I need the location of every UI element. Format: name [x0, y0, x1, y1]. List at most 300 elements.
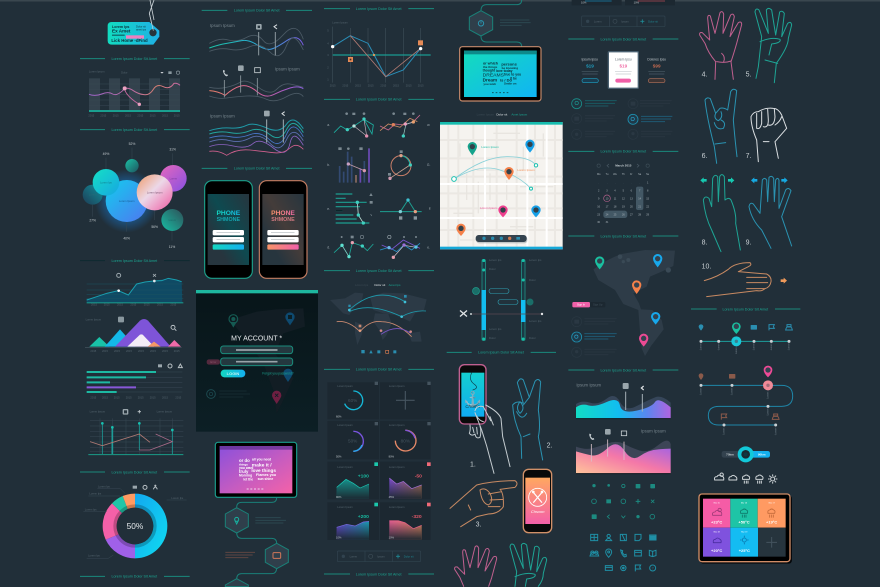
tile: purple weather: Mar 18	[714, 531, 721, 534]
panel: add new: Lorem Ipsum	[389, 384, 405, 388]
panel: stat -320: Lorem Ipsum	[389, 505, 405, 509]
heading: section 1	[80, 57, 190, 61]
heading: calendar: Lorem Ipsum Dolor Sit Amet	[600, 150, 646, 154]
chart: range sliders: Lorem Ips	[529, 258, 542, 262]
calendar: March 2015: 11	[614, 197, 617, 200]
chart: wave chart 2	[209, 65, 303, 101]
chart: bar and line chart	[88, 70, 180, 117]
icons: teal icon grid	[592, 484, 655, 519]
chart: bubble chart: 11%	[169, 245, 175, 249]
chart: mini ring d: G.	[427, 163, 430, 167]
tabs: dolor sit: Amet Ipsum	[511, 113, 528, 117]
buttons: sign in toggle: Sign Up	[593, 303, 603, 307]
timeline: winding: Lorem	[723, 428, 726, 435]
panel: gauge 50%: 50%	[348, 439, 357, 444]
chart: horizontal bars	[87, 364, 182, 400]
chart: multi line chart: Lorem Ipsum	[332, 21, 349, 25]
pin: blue top	[653, 254, 662, 267]
chart: mini triangle f	[380, 198, 431, 220]
pin: teal dim	[229, 315, 238, 328]
tablet: teal word cloud: is / Do	[500, 77, 513, 82]
tablet: pink word cloud: truly	[239, 469, 249, 474]
chart: wave chart 1: Ipsum Ipsum	[210, 23, 235, 28]
phone: teal login screen: PHONE	[216, 210, 241, 217]
panel: stat -50: 45%	[389, 495, 395, 499]
panels: cropped top cards: 10%	[634, 1, 640, 5]
pin: orange map pin	[504, 167, 514, 180]
tile: pink weather	[703, 499, 730, 528]
tablet: pink word cloud: Morning	[239, 474, 252, 478]
tile: blue weather	[730, 528, 758, 557]
chart: multi line chart: 3	[327, 53, 329, 57]
chart: horizontal bars: 2015	[90, 396, 97, 400]
chart: multi line chart: 2015	[406, 84, 412, 88]
chart: multi line chart: 2015	[368, 84, 374, 88]
chart: bubble chart	[83, 142, 187, 249]
tablet: teal word cloud: persons	[501, 61, 518, 66]
phone: anchor screen held in hand: ⚓	[464, 390, 482, 408]
tile: blue weather: Mar 19	[741, 531, 748, 534]
field: username	[221, 346, 293, 354]
panel: stat +100: +100	[358, 474, 369, 480]
button: login: LOGIN	[227, 371, 239, 376]
heading: section 1: Lorem Ipsum Dolor Sit Amet	[111, 57, 157, 61]
chart: bar and line chart: 2015	[113, 113, 119, 117]
timeline: winding: Lorem	[731, 388, 734, 395]
timeline: winding: Lorem	[767, 409, 770, 415]
phone: orange login screen: SHMONE	[271, 217, 295, 223]
pricing: featured card	[608, 52, 638, 88]
tablet: teal word cloud: true to you	[504, 73, 521, 77]
tile: purple weather: +20°C	[711, 548, 722, 553]
heading: area charts: Lorem Ipsum Dolor Sit Amet	[600, 368, 646, 372]
chart: bubble chart: 31%	[169, 148, 176, 152]
chart: bar and line chart: 2015	[137, 113, 144, 117]
hand 1: holding phone	[469, 405, 510, 473]
chart: mini horizontal bars e: e.	[327, 207, 330, 211]
pricing: featured card: $19	[619, 64, 628, 69]
chart: horizontal bars: 2015	[138, 396, 144, 400]
label: 6.: 6.	[702, 153, 708, 160]
chart: multi line chart: 2015	[380, 84, 387, 88]
tablet: teal word cloud: the things	[483, 65, 498, 69]
calendar: March 2015: 27	[630, 213, 633, 216]
hand 4: pink open palm	[700, 12, 742, 79]
badge: error: Error	[210, 360, 216, 364]
timeline: straight: Lorem	[717, 343, 720, 350]
heading: timeline	[691, 307, 800, 311]
arrows: swipe blue	[751, 177, 788, 183]
arrows: swipe teal	[700, 177, 734, 183]
panel: gauge 60%	[327, 382, 379, 419]
timeline: winding: Lorem	[774, 428, 777, 435]
chart: area line chart: 2015	[117, 303, 123, 307]
icon: hanging price tag: Ex Amet	[112, 29, 131, 34]
toggle: temperature: 70km	[726, 452, 734, 456]
heading: stats	[324, 368, 434, 372]
chart: bubble chart: Lorem	[169, 218, 177, 222]
tabs: dolor sit: Lorem Ipsum	[477, 113, 495, 117]
features: lower icon list	[572, 317, 617, 357]
chart: mini line g	[327, 235, 373, 258]
chart: range sliders: Lorem Ips	[529, 319, 542, 323]
heading: gestures: Lorem Ipsum Dolor Sit Amet	[478, 351, 524, 355]
chart: horizontal bars: 2015	[126, 396, 132, 400]
calendar: March 2015: 5	[623, 189, 625, 192]
chart: multi line chart: 2015	[393, 84, 399, 88]
calendar: March 2015: 19	[622, 205, 625, 208]
chart: bar and line chart: 2015	[162, 113, 168, 117]
calendar: March 2015: 14	[638, 197, 642, 200]
phone: teal login screen	[205, 181, 252, 278]
label: 1.: 1.	[470, 461, 476, 468]
chart: donut 50%	[83, 484, 187, 558]
pricing: right plan	[647, 58, 666, 83]
pin: orange	[632, 280, 641, 294]
phone: orange oars screen: Chsxon	[531, 509, 545, 514]
heading: stats: Lorem Ipsum Dolor Sit Amet	[356, 368, 402, 372]
heading: timeline: Lorem Ipsum Dolor Sit Amet	[722, 307, 768, 311]
heading: bottom	[80, 575, 190, 579]
pin: teal	[595, 256, 604, 269]
tile: pink weather: +23°C	[711, 519, 722, 524]
chart: multi line chart: 2015	[342, 84, 349, 88]
chart: donut 50%: 50%	[127, 521, 144, 531]
heading: gestures	[447, 351, 556, 355]
chart: mountain area chart: 2015	[150, 349, 156, 353]
panel: stat -320: -320	[412, 514, 422, 520]
pricing: right plan: Dolores Ipsu	[647, 58, 666, 62]
label: 3.: 3.	[476, 522, 482, 529]
pin: teal map pin	[468, 142, 477, 155]
chart: mini horizontal bars e	[327, 193, 373, 225]
pin: pink	[639, 334, 648, 347]
heading: section 3	[80, 259, 190, 263]
heading: map section: Lorem Ipsum Dolor Sit Amet	[356, 269, 402, 273]
chart: bubble chart: 27%	[89, 218, 96, 222]
feature: dim search	[207, 390, 250, 398]
heading: area charts	[568, 368, 678, 372]
chart: horizontal bars: 2015	[150, 396, 156, 400]
arrow: orange	[781, 278, 787, 284]
calendar: March 2015: March 2015	[615, 164, 632, 168]
calendar: March 2015: 1	[647, 181, 649, 184]
chart: mountain area chart: 2015	[174, 349, 180, 353]
calendar: March 2015: 18	[614, 205, 617, 208]
tile: add new	[758, 528, 786, 557]
calendar: March 2015: 10	[606, 197, 609, 200]
chart: bubble chart: Lorem Ipsum	[147, 190, 163, 194]
chart: bar and line chart: 2015	[125, 113, 131, 117]
toggle: temperature: 90km	[758, 452, 766, 456]
icon: hanging price tag: Dolor sit	[136, 24, 146, 28]
timeline: winding: Lorem	[700, 388, 703, 395]
chart: bubble chart: 40%	[123, 236, 130, 240]
heading: donut	[80, 470, 190, 474]
tablet: teal word cloud: it be	[510, 77, 517, 81]
tablet: teal word cloud: love today	[496, 69, 513, 73]
button bar top: Lorem	[594, 19, 602, 23]
tabs: map filter	[355, 283, 401, 287]
button bar top: Dolor sit	[648, 19, 658, 23]
tile: orange weather	[758, 499, 786, 528]
hand: pink open palm repeat	[455, 546, 497, 586]
label: 8.: 8.	[702, 239, 708, 246]
map: americas	[593, 250, 675, 356]
heading: section 3: Lorem Ipsum Dolor Sit Amet	[111, 259, 157, 263]
tile: purple weather	[703, 528, 730, 557]
calendar: March 2015: 6	[631, 189, 633, 192]
calendar: March 2015: 29	[646, 213, 650, 216]
chart: multi line chart: 2015	[418, 84, 424, 88]
chart: bubble chart: 52%	[129, 142, 135, 146]
panel: gauge 80%: 80%	[389, 455, 395, 459]
tablet: pink word cloud	[215, 442, 297, 497]
map: city street map: Lorem Ipsum	[481, 145, 499, 149]
title: my account: MY ACCOUNT *	[231, 335, 282, 342]
hand 8: two fingers spread	[703, 175, 740, 252]
chart: wave chart 1	[209, 23, 303, 56]
timeline: straight: Lorem	[735, 347, 738, 354]
calendar: March 2015: 7	[639, 189, 641, 192]
panel: gauge 50%	[327, 421, 379, 459]
chart: donut 50%: Lorem Ips	[171, 496, 184, 500]
panel: gauge 60%: 60%	[348, 398, 357, 403]
flow: hexagon connector chain	[225, 497, 288, 587]
calendar: March 2015: 9	[598, 197, 600, 200]
calendar: March 2015: 15	[646, 197, 650, 200]
tile: teal weather	[730, 499, 758, 528]
chart: multi line chart: 5	[327, 29, 329, 33]
chart: gradient area chart 2	[576, 429, 671, 474]
icons: weather row	[714, 473, 777, 484]
map: world route map	[330, 293, 427, 353]
icon: hanging price tag: Lick Home -dFind	[111, 38, 148, 43]
chart: mountain area chart: Lorem Ipsum	[86, 318, 102, 322]
calendar: March 2015: Th	[622, 173, 625, 176]
calendar: March 2015: 31	[606, 221, 609, 224]
calendar: March 2015: 22	[646, 205, 650, 208]
heading: bottom: Lorem Ipsum Dolor Sit Amet	[111, 575, 157, 579]
tablet: teal word cloud: thought	[483, 69, 496, 73]
hand 3: pointing	[450, 481, 517, 527]
map: city street map: Lorem Ipsum	[517, 168, 535, 172]
panel: stat +200	[327, 502, 379, 540]
pin: orange map pin 2	[456, 224, 466, 236]
panel: my account login	[196, 290, 318, 432]
tablet: pink word cloud: let the	[243, 477, 253, 481]
icon: card hexagon	[265, 543, 288, 569]
label: 7.: 7.	[746, 153, 752, 160]
chart: mini bars c: b.	[327, 163, 330, 167]
icon: hanging price tag	[108, 0, 159, 45]
heading: map section	[324, 269, 434, 273]
icon: location hexagon	[225, 508, 248, 533]
icon: partial hexagon	[225, 579, 248, 587]
chart: bubble chart: Lorem	[89, 193, 97, 197]
panel: stat +100	[327, 462, 379, 499]
hand 10: flat hand	[704, 263, 771, 297]
tablet: pink word cloud: all you need	[252, 458, 271, 462]
heading: wave charts: Lorem Ipsum Dolor Sit Amet	[234, 9, 280, 13]
tile: pink weather: Mar 15	[714, 502, 721, 505]
chart: mountain area chart: 2015	[126, 349, 132, 353]
calendar: March 2015: Sa	[638, 173, 642, 176]
calendar: March 2015: 25	[614, 213, 617, 216]
features: icon list	[572, 99, 672, 139]
chart: bar and line chart: 2015	[100, 113, 107, 117]
chart: multi line chart: 4	[327, 41, 329, 45]
calendar: March 2015: 8	[647, 189, 649, 192]
calendar: March 2015: 21	[638, 205, 642, 208]
timeline: straight: Lorem	[700, 343, 703, 350]
chart: mini line b: w.	[427, 123, 430, 127]
chart: bar and line chart: Dolor	[121, 70, 128, 74]
phone: orange login screen	[259, 181, 307, 278]
pin: blue lower	[651, 312, 660, 325]
tablet: teal word cloud: Smile on	[504, 82, 517, 86]
chart: mini line g: d.	[327, 245, 330, 249]
toolbar: map controls	[476, 235, 527, 243]
phone: orange login screen: PHONE	[271, 210, 295, 217]
chart: bar and line chart: 2015	[150, 113, 156, 117]
chart: range sliders: Lorem Ips	[489, 327, 502, 331]
map: city street map	[440, 122, 563, 249]
hand: teal palm repeat	[510, 543, 547, 586]
calendar: March 2015: 24	[606, 213, 609, 216]
chart: mini line b	[380, 112, 430, 138]
calendar: March 2015: We	[613, 173, 617, 176]
pin: pink map pin	[498, 205, 508, 217]
calendar: March 2015	[597, 164, 650, 224]
calendar: March 2015: Fr	[630, 173, 633, 176]
button bar: Lorem	[350, 554, 358, 558]
button bar	[337, 551, 421, 562]
tile: teal weather: Mar 16	[741, 502, 748, 505]
badge: error	[207, 359, 220, 365]
chart: mountain area chart: 2015	[114, 349, 120, 353]
tablet: pink word cloud: you want	[239, 466, 254, 470]
icon: scissors	[460, 310, 467, 316]
chart: bubble chart: Lorem	[170, 176, 178, 180]
panel: gauge 50%: 50%	[336, 455, 342, 459]
heading: donut: Lorem Ipsum Dolor Sit Amet	[111, 470, 157, 474]
chart: area line chart: 2015	[157, 303, 163, 307]
tablet: teal word cloud	[460, 47, 541, 101]
chart: multi line chart	[327, 21, 431, 88]
chart: mini ring d	[388, 150, 430, 180]
calendar: March 2015: 26	[622, 213, 625, 216]
phone: anchor screen held in hand: Chsxon	[465, 404, 481, 409]
calendar: March 2015: 2	[598, 189, 600, 192]
button: login	[221, 370, 245, 377]
panel: stat +200: Lorem Ipsum	[337, 505, 354, 509]
chart: pin line chart	[88, 409, 183, 455]
tabs: dolor sit: Dolor sit	[496, 113, 507, 117]
tablet: pink word cloud: or do	[239, 458, 250, 463]
calendar: March 2015: Mo	[597, 173, 601, 176]
heading: phones	[202, 167, 312, 171]
chart: gradient area chart 2: Ipsum Ipsum	[641, 429, 666, 434]
chart: horizontal bars: 2015	[175, 396, 182, 400]
pin: blue dim	[285, 312, 295, 325]
pricing: left plan: Ipsum Ipsu	[582, 58, 598, 62]
heading: line chart	[324, 7, 434, 11]
chart: area line chart: 2015	[91, 303, 97, 307]
hand 7: white fist	[751, 108, 787, 162]
chart: area line chart: 2015	[130, 303, 137, 307]
calendar: March 2015: 16	[597, 205, 601, 208]
timeline: winding	[699, 366, 793, 435]
chart: multi line chart: 2	[327, 66, 329, 70]
button bar top: Ipsum	[621, 19, 629, 23]
button bar top	[582, 16, 665, 27]
panels: cropped top cards	[572, 0, 675, 5]
icon: hanging price tag: Lorem Ips	[112, 25, 129, 29]
chart: mountain area chart: 2015	[138, 349, 144, 353]
map: city street map: Lorem Ipsum	[480, 206, 498, 210]
heading: bottom column three: Lorem Ipsum Dolor Sit Amet	[356, 572, 402, 576]
chart: range sliders: Lorem Ips	[489, 258, 502, 262]
panel: gauge 50%: Lorem Ipsum	[337, 423, 354, 427]
hand 2: peace sign	[513, 379, 543, 460]
tile: orange weather: +19°C	[766, 519, 777, 524]
heading: section 2	[80, 128, 190, 132]
tablet: pink word cloud: sun shine	[258, 477, 273, 481]
link: forgot password: Forgot you password?	[262, 372, 294, 376]
chart: donut 50%: Lorem Ips	[98, 484, 111, 488]
panel: gauge 80%	[380, 421, 431, 459]
chart: gradient area chart 1: Ipsum Ipsum	[576, 382, 602, 387]
pricing: right plan: $99	[653, 64, 661, 69]
panel: gauge 60%: Lorem Ipsum	[337, 384, 354, 388]
tablet: pink word cloud: love things	[251, 468, 276, 473]
panel: gauge 60%: 60%	[336, 415, 342, 419]
chart: bar and line chart: Lorem Ipsum	[89, 70, 105, 74]
calendar: March 2015: 23	[597, 213, 601, 216]
icons: blue icon grid	[590, 534, 656, 571]
tablet: weather dashboard	[699, 494, 792, 564]
label: 10.: 10.	[702, 263, 711, 270]
hand 6: rock sign	[705, 89, 737, 163]
flow: hexagon with clock	[469, 0, 531, 47]
chart: area line chart: 2015	[144, 303, 150, 307]
chart: horizontal bars: 2015	[162, 396, 168, 400]
tablet: teal word cloud: be knowing	[502, 66, 518, 70]
chart: bubble chart: 56%	[151, 225, 158, 229]
tablet: teal word cloud: or which	[483, 62, 498, 66]
chart: mountain area chart	[85, 317, 182, 353]
chart: donut 50%: Lorem Ips	[85, 508, 97, 512]
chart: pin line chart: Lorem Ipsum	[157, 410, 173, 414]
chart: donut 50%: Lorem Ips	[89, 492, 102, 496]
heading: world map	[568, 234, 678, 238]
calendar: March 2015: Tu	[606, 173, 609, 176]
calendar: March 2015: 30	[597, 221, 601, 224]
tablet: teal word cloud: DREAMS	[483, 73, 505, 79]
pin: blue map pin 2	[531, 205, 541, 217]
calendar: March 2015: 12	[622, 197, 625, 200]
chart: multi line chart: 2015	[330, 84, 336, 88]
chart: range sliders: Dolor	[529, 278, 536, 282]
panel: stat +100: 90%	[336, 495, 342, 499]
phone: anchor screen held in hand	[459, 365, 486, 424]
buttons: sign in toggle	[572, 302, 605, 307]
tile: blue weather: +25°C	[739, 548, 750, 553]
label: 9.: 9.	[746, 239, 752, 246]
calendar: March 2015: 28	[638, 213, 642, 216]
heading: pricing	[568, 37, 678, 41]
